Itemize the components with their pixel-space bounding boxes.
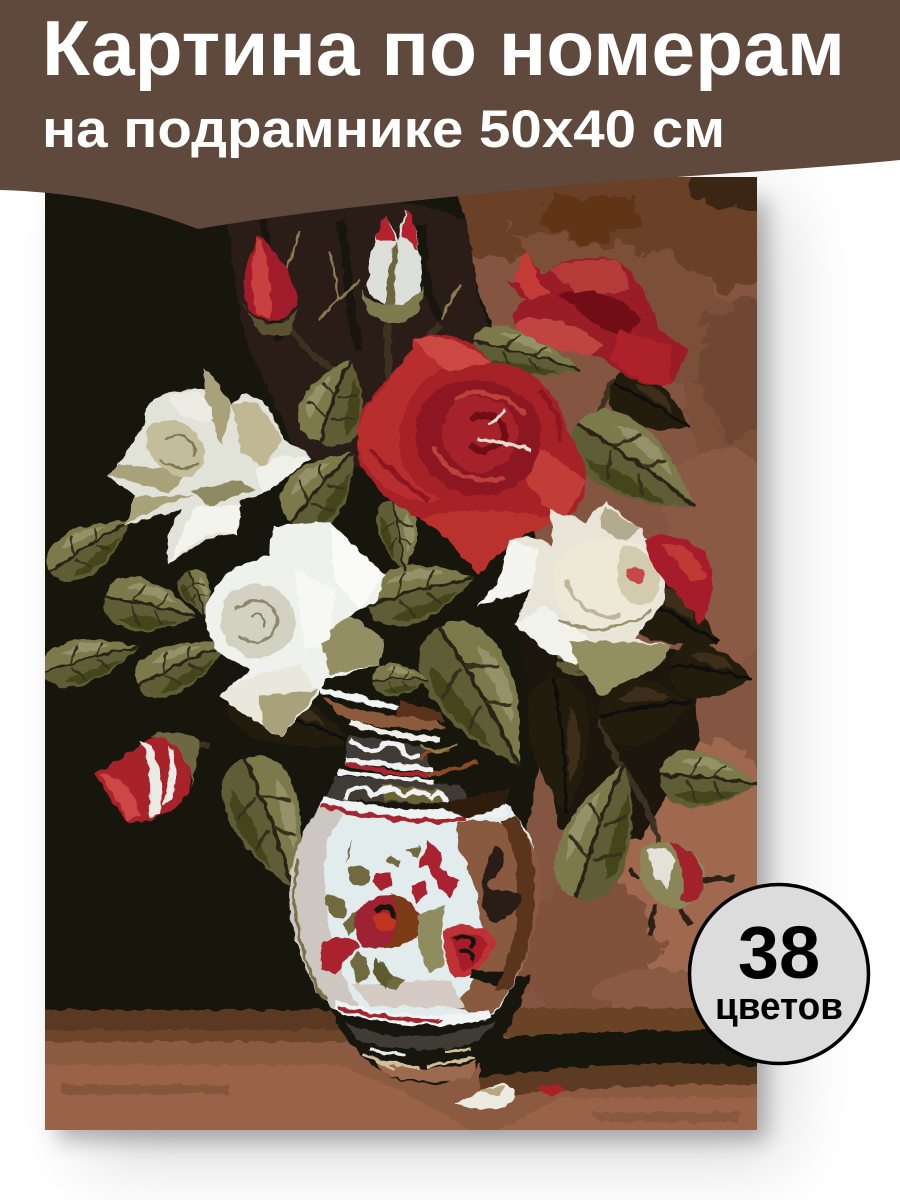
badge: 38 colours: 38 — [738, 911, 820, 994]
fallen petals — [456, 1082, 566, 1109]
subtitle: на подрамнике 50х40 см — [42, 100, 725, 159]
cream rose: center right — [478, 500, 672, 695]
vase floral ornament — [320, 840, 505, 990]
badge: 38 colours — [690, 884, 868, 1064]
red rose: far right — [645, 535, 712, 625]
painting: roses in a vase — [30, 150, 790, 1142]
table — [45, 1006, 757, 1130]
vase body — [290, 804, 539, 1023]
vase lip — [322, 697, 445, 729]
white rose: upper left — [107, 368, 312, 565]
black backdrop — [30, 160, 700, 1020]
red rose: top right — [505, 250, 688, 386]
top banner — [0, 0, 900, 229]
bud: top left red — [240, 236, 298, 335]
vase base — [330, 975, 530, 1084]
canvas drop shadow — [58, 200, 785, 1160]
title: Картина по номерам — [42, 4, 845, 92]
vase — [290, 691, 541, 1084]
badge: 38 colours: цветов — [715, 986, 843, 1028]
large red rose: center — [357, 335, 586, 573]
vase lower stripe — [335, 1005, 490, 1020]
vase neck — [344, 734, 507, 804]
bud: lower left red-white — [95, 732, 200, 822]
leaves and stems — [37, 230, 761, 910]
white rose: center left — [205, 522, 385, 737]
stems — [199, 318, 661, 843]
bud: lower right — [630, 842, 735, 935]
dark background leaves — [600, 686, 692, 740]
bud: top center white — [360, 208, 425, 323]
olive leaves — [298, 360, 364, 447]
painting background — [30, 150, 790, 1142]
buds — [95, 208, 735, 935]
